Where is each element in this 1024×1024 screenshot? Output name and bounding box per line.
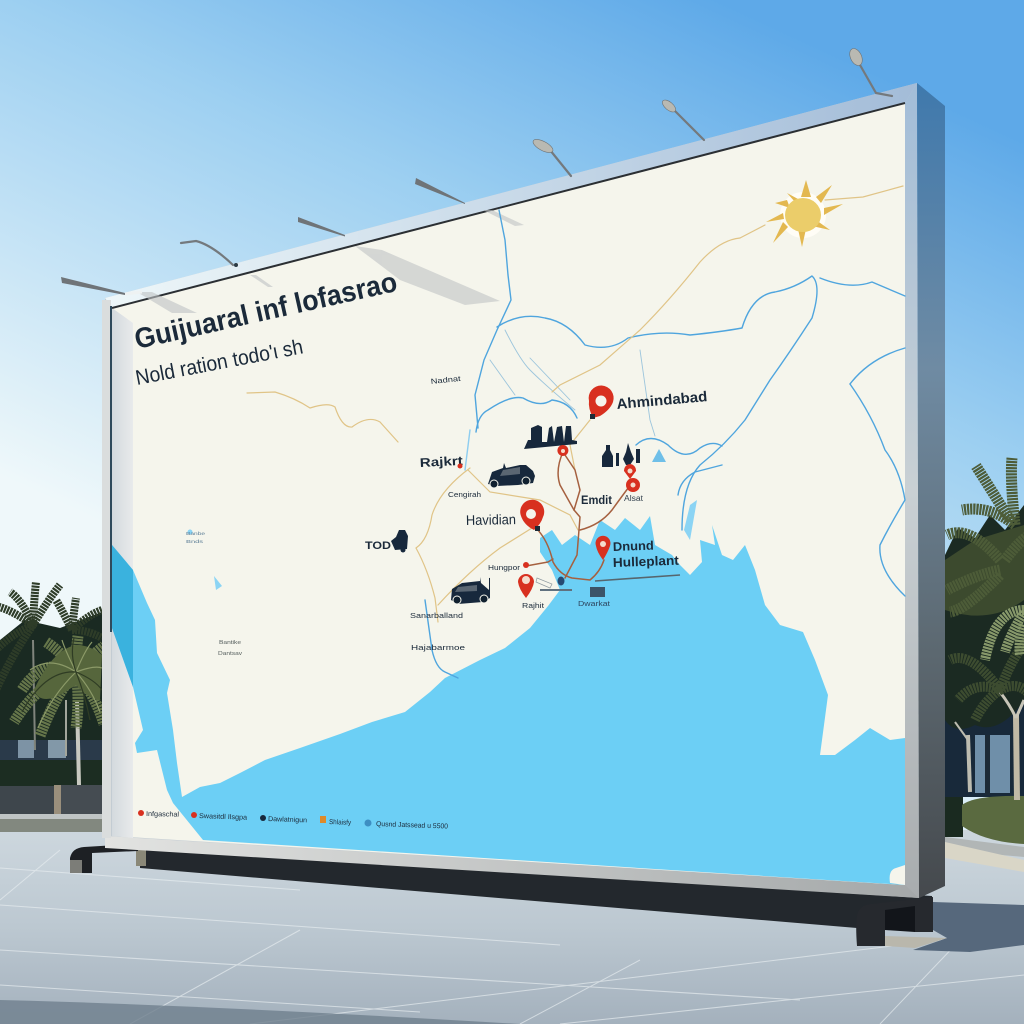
legend item 5: Qusnd Jatssead u 5500: [376, 821, 448, 831]
lamp 7: [847, 47, 892, 96]
lamp 5: [531, 137, 571, 176]
city labels west: Cengirah: [448, 490, 481, 499]
lamp shadows on panel: [137, 210, 524, 313]
label: Dhund Hulleplant: Hulleplant: [613, 553, 680, 570]
lamp 2: [181, 241, 238, 267]
label and icon: truck Todd: TOD: [365, 540, 391, 552]
city labels west: Sanarballand: [410, 611, 463, 620]
sea on left bevel: [112, 545, 133, 687]
icon: small boat and fort: Dwarkat: [578, 601, 610, 608]
billboard base and feet: [70, 845, 947, 948]
pin: Dhund: [596, 536, 610, 560]
city labels west: Bnds: [186, 539, 204, 544]
label: Ahmedabad: Ahmindabad: [616, 389, 708, 413]
pins: Emdit cluster: [557, 445, 640, 492]
pin: Havidian: [520, 500, 544, 531]
label: Alsat: Alsat: [624, 494, 644, 503]
title: Guijuaral inf lofasrao: [132, 266, 400, 356]
icon: bottles and vases: [602, 443, 640, 467]
lamp 4: [415, 178, 465, 204]
city labels west: Bantike: [219, 640, 241, 646]
legend: [138, 810, 448, 831]
palm trees left: [0, 582, 104, 785]
small lakes: [188, 500, 697, 590]
ground shadows: [0, 902, 1024, 1024]
rivers: [425, 210, 905, 678]
city labels west: Nadnat: [430, 374, 462, 386]
roads: [247, 186, 903, 622]
icon: car: [488, 463, 535, 488]
label: Rajkot: Rajkrt: [419, 454, 464, 470]
city labels west: Hajabarmoe: [411, 643, 465, 652]
cream corner at lower right: [890, 865, 905, 885]
legend item 2: Swasitdl Ilsgpa: [199, 813, 247, 822]
city labels west: Dantsav: [218, 651, 243, 657]
icon: small boat and fort: [536, 576, 610, 608]
label: Havidian: Havidian: [466, 511, 516, 528]
city labels west: Banbe: [186, 531, 206, 536]
legend item 4: [320, 816, 352, 827]
pin: Ahmedabad: [589, 386, 614, 419]
legend item 1: [138, 810, 180, 819]
legend item 3: Dawlatnigun: [268, 816, 307, 824]
legend item 1: Infgaschal: [146, 811, 180, 819]
label and icon: truck Todd: [365, 530, 408, 552]
background building, pavement and hedge right: [945, 700, 1024, 872]
icon: second car: [451, 577, 490, 604]
icon: sun: [766, 180, 843, 247]
lamp 3: [298, 217, 345, 236]
label: Dhund Hulleplant: Dnund: [613, 539, 654, 554]
pin: Rajhit: [518, 574, 545, 610]
billboard frame: [102, 83, 945, 898]
sea: main and west coast: [112, 516, 905, 885]
label: Hungpor with dot: [488, 562, 529, 572]
background buildings and hedges left: [0, 725, 102, 832]
icon: blue triangle: [652, 449, 666, 462]
label: Emdit: Emdit: [581, 495, 612, 507]
legend item 4: Shlaisfy: [329, 819, 352, 827]
city labels west: [186, 374, 481, 657]
lamp 6: [660, 98, 704, 140]
brown travel routes: [526, 452, 680, 581]
subtitle: Nold ration todo'ι sh: [134, 335, 305, 390]
map panel: [111, 103, 905, 885]
label: Hungpor with dot: Hungpor: [488, 563, 521, 572]
icon: skyline: [524, 425, 577, 449]
lamp 1: [61, 277, 142, 295]
pin: Rajhit: Rajhit: [522, 601, 545, 610]
pavement floor: [0, 830, 1024, 1024]
palm trees right: [945, 458, 1024, 800]
label: Dhund Hulleplant: [613, 539, 680, 570]
